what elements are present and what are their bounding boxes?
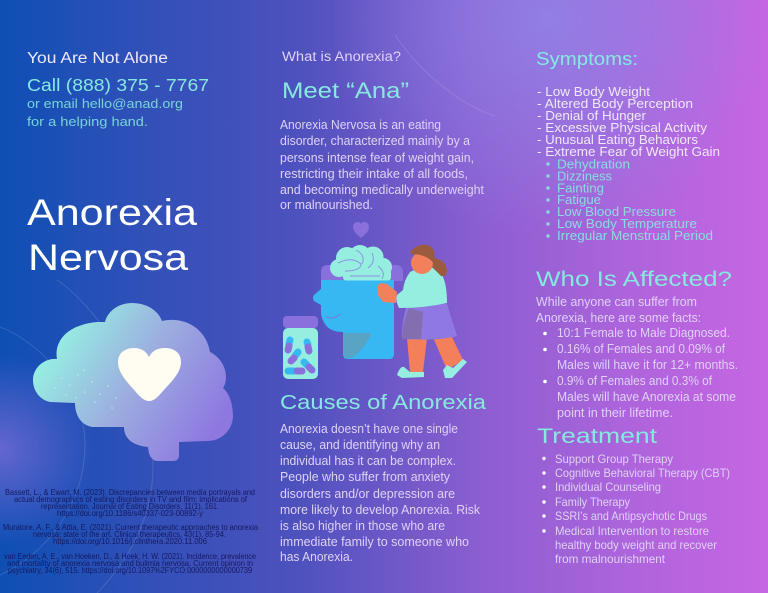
causes paragraph: immediate family to someone who (280, 534, 469, 549)
behavioural symptoms list: - Unusual Eating Behaviors (537, 133, 698, 147)
treatment list: healthy body weight and recover (555, 538, 717, 552)
definition paragraph: restricting their intake of all foods, (280, 166, 468, 181)
woman (377, 245, 467, 378)
icon: heart (118, 348, 181, 401)
definition paragraph: Anorexia Nervosa is an eating (280, 117, 441, 132)
references: representation. Journal of Eating Disorders, 11(1), 161. (41, 502, 219, 511)
references: psychiatry, 34(6), 515. https://doi.org/10.1097%2FYCO.0000000000000739 (8, 566, 252, 575)
heading: causes: Causes of Anorexia (280, 391, 487, 414)
behavioural symptoms list: - Altered Body Perception (537, 97, 693, 111)
panel: what is anorexia (280, 49, 484, 212)
causes paragraph: disorders and/or depression are (280, 486, 455, 501)
treatment list: Medical Intervention to restore (555, 524, 709, 538)
definition paragraph: and becoming medically underweight (280, 182, 484, 197)
physical symptoms list (546, 158, 713, 243)
behavioural symptoms list: - Excessive Physical Activity (537, 121, 708, 135)
treatment list: Family Therapy (555, 495, 630, 509)
pill jar (283, 316, 318, 379)
facts list (543, 325, 738, 420)
title: Anorexia (27, 191, 197, 233)
icon: brain with heart (33, 303, 233, 461)
section label: What is Anorexia? (282, 49, 401, 64)
treatment list: Individual Counseling (555, 480, 661, 494)
facts list: Males will have Anorexia at some (557, 389, 736, 404)
causes paragraph: People who suffer from anxiety (280, 469, 451, 484)
physical symptoms list: Fainting (557, 182, 604, 196)
causes paragraph: cause, and identifying why an (280, 437, 440, 452)
title: Nervosa (28, 236, 188, 278)
definition paragraph: persons intense fear of weight gain, (280, 150, 474, 165)
references: Muratore, A. F., & Attia, E. (2021). Current therapeutic approaches to anorexia (3, 523, 258, 532)
facts list: Males will have it for 12+ months. (557, 357, 738, 372)
definition paragraph: disorder, characterized mainly by a (280, 133, 471, 148)
references: and mortality of anorexia nervosa and bulimia nervosa. Current opinion in (7, 559, 253, 568)
intro text: While anyone can suffer from (536, 294, 697, 309)
references (3, 488, 258, 575)
facts list: 0.16% of Females and 0.09% of (557, 341, 725, 356)
causes paragraph: more likely to develop Anorexia. Risk (280, 502, 481, 517)
helping hand line: for a helping hand. (27, 114, 148, 129)
causes paragraph: is also higher in those who are (280, 518, 445, 533)
treatment list: Cognitive Behavioral Therapy (CBT) (555, 466, 730, 480)
references: nervosa: state of the art. Clinical therapeutics, 43(1), 85-94. (33, 530, 226, 539)
head (313, 265, 403, 359)
definition paragraph (280, 117, 484, 212)
icon: small heart (353, 222, 369, 238)
heading: Meet Ana: Meet “Ana” (282, 78, 409, 103)
references: actual demographics of eating disorders in TV and film: implications of (14, 495, 248, 504)
causes paragraph (280, 421, 481, 564)
treatment list: SSRI’s and Antipsychotic Drugs (555, 509, 707, 523)
treatment list: Support Group Therapy (555, 452, 673, 466)
heading: symptoms: Symptoms: (536, 49, 638, 69)
email line: or email hello@anad.org (27, 96, 183, 111)
behavioural symptoms list: - Extreme Fear of Weight Gain (537, 145, 720, 159)
panel: who is affected (536, 267, 738, 420)
phone number: Call (888) 375 - 7767 (27, 75, 209, 95)
helpline heading: You Are Not Alone (27, 50, 168, 67)
illustration: woman tending a brain in a head with pill jar (283, 222, 467, 379)
facts list: 0.9% of Females and 0.3% of (557, 373, 712, 388)
intro text: Anorexia, here are some facts: (536, 310, 701, 325)
panel: symptoms (536, 49, 720, 243)
physical symptoms list: Dizziness (557, 170, 612, 184)
definition paragraph: or malnourished. (280, 197, 373, 212)
title (27, 191, 197, 278)
references: https://doi.org/10.1016/j.clinthera.2020.11.006 (53, 537, 207, 546)
panel: causes of anorexia (280, 391, 487, 564)
heading: who is affected: Who Is Affected? (536, 267, 732, 291)
treatment list (542, 452, 730, 566)
references: van Eeden, A. E., van Hoeken, D., & Hoek, H. W. (2021). Incidence, prevalence (4, 552, 256, 561)
behavioural symptoms list (537, 85, 720, 159)
intro text (536, 294, 701, 325)
physical symptoms list: Low Blood Pressure (557, 205, 676, 219)
brain (330, 245, 392, 280)
physical symptoms list: Fatigue (557, 193, 601, 207)
references: https://doi.org/10.1186/s40337-023-00892-y (57, 509, 204, 518)
panel: helpline (27, 50, 209, 129)
heading: treatment: Treatment (537, 425, 657, 448)
physical symptoms list: Low Body Temperature (557, 217, 697, 231)
facts list: point in their lifetime. (557, 405, 673, 420)
behavioural symptoms list: - Low Body Weight (537, 85, 651, 99)
causes paragraph: individual has it can be complex. (280, 453, 456, 468)
treatment list: from malnourishment (555, 552, 666, 566)
physical symptoms list: Dehydration (557, 158, 630, 172)
facts list: 10:1 Female to Male Diagnosed. (557, 325, 730, 340)
causes paragraph: Anorexia doesn’t have one single (280, 421, 458, 436)
causes paragraph: has Anorexia. (280, 549, 353, 564)
physical symptoms list: Irregular Menstrual Period (557, 229, 713, 243)
references: Bassett, L., & Ewart, M. (2023). Discrepancies between media portrayals and (5, 488, 255, 497)
panel: treatment (537, 425, 730, 566)
behavioural symptoms list: - Denial of Hunger (537, 109, 646, 123)
